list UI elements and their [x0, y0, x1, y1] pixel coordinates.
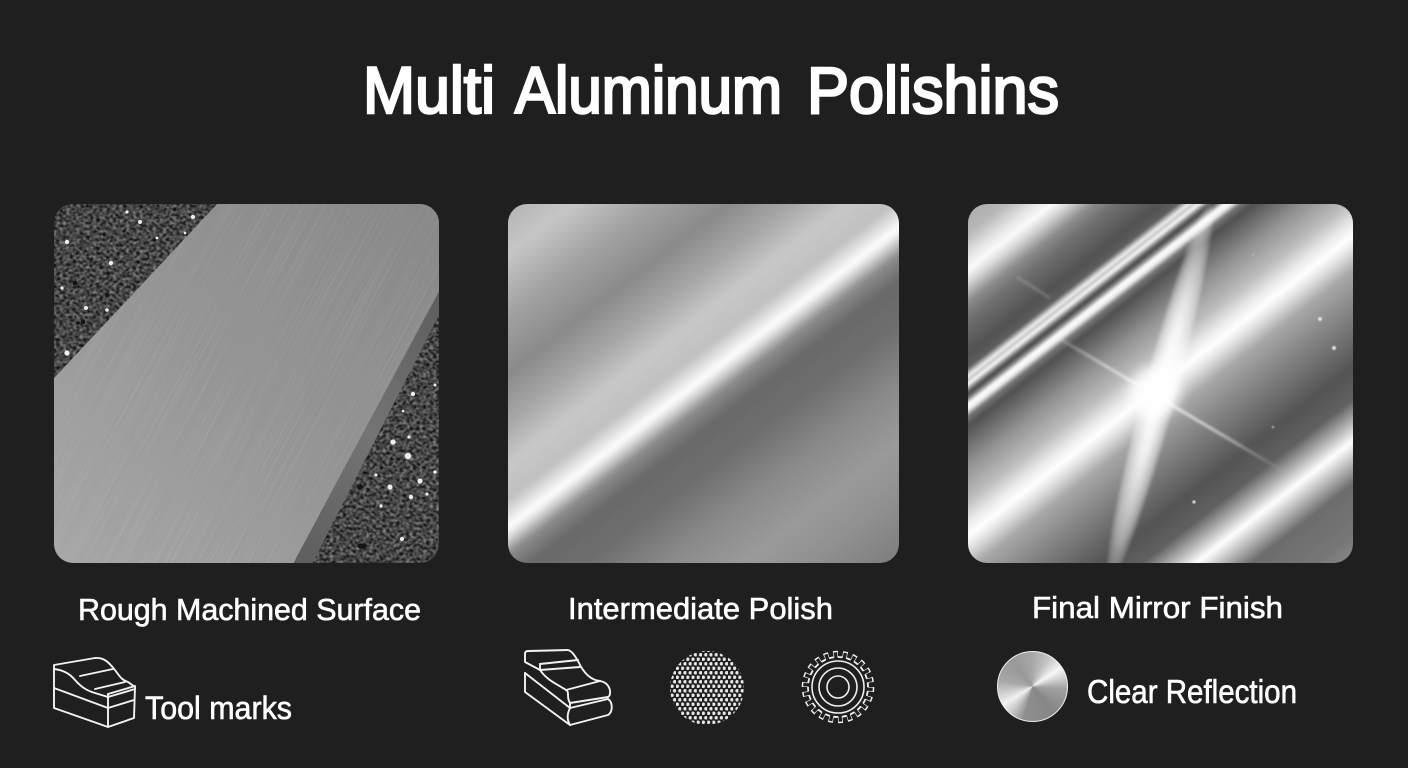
flare: central glow: [1127, 363, 1186, 419]
flare: thin cross streak: [1017, 277, 1285, 472]
title: Aluminum: [515, 53, 782, 127]
icon: abrasive dot disc: [670, 651, 744, 725]
caption: final mirror finish: Final Mirror Finish: [1032, 590, 1283, 625]
caption: rough machined surface: Rough Machined Surface: [78, 592, 421, 627]
icon: polishing pad stack: [525, 650, 612, 725]
panel: intermediate polish: [508, 204, 899, 563]
icon: polishing gear wheel: [805, 654, 871, 720]
title: [363, 53, 1059, 127]
panel: rough machined surface: [54, 204, 439, 563]
label: clear reflection: Clear Reflection: [1087, 673, 1297, 710]
title: Polishins: [807, 53, 1059, 127]
brushed aluminum plate: [54, 204, 439, 563]
title: Multi: [363, 53, 495, 127]
bright specks: [1192, 254, 1336, 504]
icon: machined block: [54, 658, 135, 727]
label: tool marks: Tool marks: [145, 690, 292, 726]
rough ground texture: [54, 204, 439, 563]
flare: long reflection streak: [1106, 204, 1213, 563]
icon: mirror disc: [997, 651, 1068, 722]
caption: intermediate polish: Intermediate Polish: [568, 591, 833, 626]
aluminum plate side face: [293, 290, 440, 564]
panel: final mirror finish: [968, 204, 1353, 563]
